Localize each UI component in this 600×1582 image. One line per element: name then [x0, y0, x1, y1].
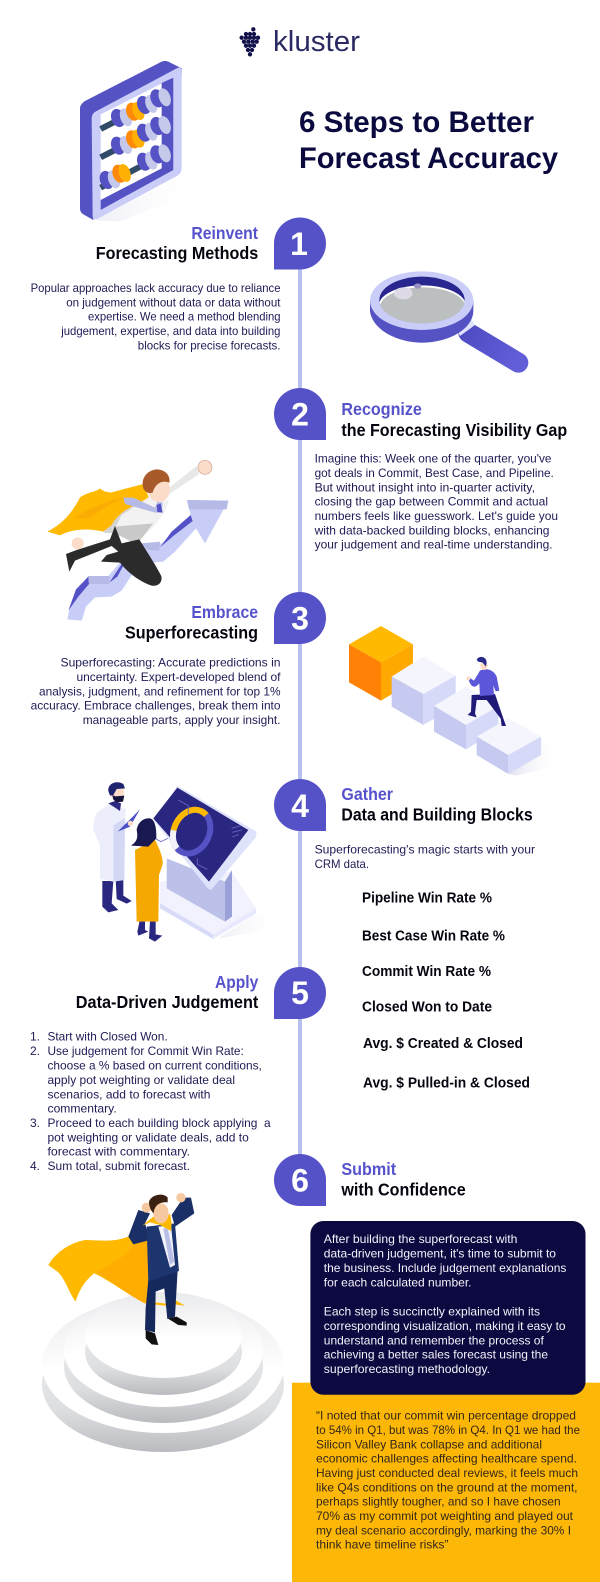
step 2 heading: Recognize [341, 399, 422, 419]
quote text: “I noted that our commit win percentage dropped [316, 1409, 576, 1423]
step 5 badge: 5 [291, 975, 309, 1011]
step 2 body text: got deals in Commit, Best Case, and Pipeline. [315, 466, 554, 480]
step 4 heading: Gather [341, 784, 393, 804]
step 5 numbered list: 2. [30, 1044, 40, 1058]
step 5 numbered list: commentary. [48, 1102, 117, 1116]
step 6 heading [340, 1159, 466, 1200]
building blocks list [362, 891, 530, 1092]
block 4 [477, 718, 541, 774]
step 5 numbered list: apply pot weighting or validate deal [48, 1073, 235, 1087]
building blocks list: Avg. $ Created & Closed [363, 1036, 523, 1052]
step 4 heading [341, 784, 533, 825]
icon: abacus [80, 61, 202, 222]
wordmark: kluster [273, 26, 360, 58]
block 3 [434, 687, 498, 749]
step 4 body text [315, 843, 535, 871]
arms [128, 1210, 150, 1244]
step 2 body text: Imagine this: Week one of the quarter, you've [315, 451, 552, 465]
panel: submit explanation: After building the superforecast with [324, 1232, 517, 1246]
step 2 body text: numbers feels like guesswork. Let's guide you [315, 509, 558, 523]
tie [123, 498, 163, 513]
panel: submit explanation: for each calculated number. [324, 1276, 472, 1290]
step 3 body text: accuracy. Embrace challenges, break them into [31, 699, 281, 713]
tier 1 [42, 1297, 284, 1452]
panel: submit explanation: corresponding visualization, making it easy to [324, 1319, 566, 1333]
beads row 1 [109, 87, 173, 129]
step 3 body text: Superforecasting: Accurate predictions in [60, 656, 280, 670]
step 5 heading: Data-Driven Judgement [76, 992, 258, 1012]
climbing figure [466, 657, 506, 726]
beads row 2 [109, 114, 173, 157]
step 1 body text: expertise. We need a method blending [88, 310, 280, 324]
timeline spine [298, 243, 302, 1193]
step 6 badge: 6 [291, 1162, 309, 1198]
trousers [145, 1270, 178, 1332]
quote text: economic challenges affecting healthcare spend. [316, 1452, 577, 1466]
shirt and tie [158, 1225, 175, 1268]
step 2 body text: closing the gap between Commit and actual [315, 495, 548, 509]
illustration: podium [42, 1292, 284, 1452]
step 2 badge: 2 [291, 396, 309, 432]
title: 6 Steps to Better [299, 106, 535, 139]
quote text: Having just conducted deal reviews, it feels much [316, 1466, 578, 1480]
step 2 body text [314, 451, 558, 552]
building blocks list: Closed Won to Date [362, 1000, 492, 1016]
icon: magnifying glass [370, 271, 518, 363]
step 5 numbered list: Sum total, submit forecast. [48, 1159, 190, 1173]
panel: submit explanation: data-driven judgement, it's time to submit to [324, 1247, 556, 1261]
step 1 body text [31, 281, 281, 352]
step 5 numbered list: 1. [30, 1030, 40, 1044]
kiosk stand [167, 858, 232, 922]
building blocks list: Pipeline Win Rate % [362, 891, 492, 907]
title: Forecast Accuracy [299, 142, 559, 175]
step 3 badge: 3 [291, 600, 309, 636]
beads row 3 [97, 143, 173, 191]
step 5 numbered list: choose a % based on current conditions, [48, 1059, 262, 1073]
panel: quote background [292, 1383, 600, 1582]
step 3 heading: Superforecasting [125, 623, 258, 643]
head [143, 469, 170, 502]
step 1 heading [96, 223, 259, 263]
quote text: like Q4s conditions on the ground at the moment, [316, 1480, 578, 1494]
step 2 badge [274, 388, 326, 440]
step 5 numbered list: Use judgement for Commit Win Rate: [48, 1044, 244, 1058]
kiosk screen [153, 786, 257, 890]
woman in yellow coat [131, 818, 163, 942]
step 5 numbered list: 3. [30, 1116, 40, 1130]
step 4 badge: 4 [291, 788, 309, 824]
step 3 body text: uncertainty. Expert-developed blend of [76, 670, 281, 684]
step 5 heading [76, 972, 259, 1012]
step 3 heading: Embrace [191, 602, 258, 622]
step 5 numbered list: Proceed to each building block applying a [48, 1116, 271, 1130]
quote text: 70% as my commit pot weighting and played out [316, 1509, 574, 1523]
step 2 body text: your judgement and real-time understanding. [315, 538, 553, 552]
step 1 heading: Reinvent [191, 223, 258, 243]
logo: kluster [239, 26, 360, 58]
quote text [316, 1409, 580, 1552]
tier 3 [85, 1292, 242, 1395]
step 5 badge [274, 967, 326, 1019]
step 3 badge [274, 592, 326, 644]
head [149, 1195, 169, 1223]
kiosk base [160, 872, 256, 939]
quote text: perhaps slightly tougher, and so I have chosen [316, 1495, 561, 1509]
shirt [115, 497, 169, 543]
building blocks list: Commit Win Rate % [362, 964, 491, 980]
shoes [146, 1330, 158, 1345]
orange cube [349, 626, 413, 701]
raised arm [168, 466, 199, 494]
quote text: my deal scenario accordingly, marking the 30% I [316, 1523, 571, 1537]
step 2 body text: But without insight into in-quarter activity, [315, 480, 535, 494]
panel: submit explanation: understand and remember the process of [324, 1333, 544, 1347]
step 1 heading: Forecasting Methods [96, 243, 259, 263]
panel: submit explanation: Each step is succinctly explained with its [324, 1305, 540, 1319]
illustration: climbing blocks [349, 626, 562, 776]
step 5 numbered list [30, 1030, 271, 1173]
step 2 body text: with data-backed building blocks, enhancing [314, 523, 550, 537]
step 1 body text: judgement, expertise, and data into building [60, 324, 280, 338]
legs [66, 526, 162, 586]
step 4 body text: Superforecasting's magic starts with your [315, 843, 535, 857]
step 5 numbered list: Start with Closed Won. [48, 1030, 168, 1044]
panel: submit explanation: superforecasting methodology. [324, 1362, 490, 1376]
icon: grape cluster [239, 27, 260, 56]
block 2 [392, 657, 456, 725]
step 1 body text: blocks for precise forecasts. [138, 338, 280, 352]
collar [142, 1213, 172, 1231]
step 3 body text [31, 656, 281, 727]
step 2 heading: the Forecasting Visibility Gap [341, 420, 567, 440]
step 5 numbered list: forecast with commentary. [48, 1145, 190, 1159]
cape [48, 1235, 185, 1307]
jacket [147, 1223, 179, 1282]
step 1 badge [274, 218, 326, 270]
cape [47, 484, 150, 535]
arrow [67, 500, 228, 621]
step 4 heading: Data and Building Blocks [341, 805, 533, 825]
step 1 body text: Popular approaches lack accuracy due to reliance [31, 281, 281, 295]
illustration: caped businessman [48, 1193, 194, 1345]
panel: submit explanation [310, 1221, 586, 1395]
step 6 heading: Submit [341, 1159, 396, 1179]
step 3 heading [125, 602, 258, 643]
step 5 numbered list: 4. [30, 1159, 40, 1173]
quote text: Silicon Valley Bank collapse and additional [316, 1437, 542, 1451]
tier 2 [64, 1293, 263, 1423]
quote text: to 54% in Q1, but was 78% in Q4. In Q1 we had the [316, 1423, 580, 1437]
step 5 numbered list: scenarios, add to forecast with [48, 1087, 210, 1101]
quote text: think have timeline risks” [316, 1538, 448, 1552]
step 5 heading: Apply [215, 972, 259, 992]
step 3 body text: manageable parts, apply your insight. [83, 713, 280, 727]
step 1 body text: on judgement without data or data without [66, 295, 281, 309]
panel: submit explanation: achieving a better sales forecast using the [324, 1348, 548, 1362]
step 6 badge [274, 1154, 326, 1206]
step 4 badge [274, 779, 326, 831]
step 6 heading: with Confidence [340, 1180, 466, 1200]
title [299, 106, 559, 175]
illustration: flying hero with arrow [47, 460, 228, 621]
doctor [93, 782, 140, 912]
panel: submit explanation: the business. Include judgement explanations [324, 1261, 566, 1275]
building blocks list: Avg. $ Pulled-in & Closed [363, 1076, 530, 1092]
step 5 numbered list: pot weighting or validate deals, add to [48, 1130, 249, 1144]
step 3 body text: analysis, judgment, and refinement for top 1% [39, 684, 281, 698]
step 1 badge: 1 [290, 226, 308, 262]
step 4 body text: CRM data. [315, 857, 369, 871]
step 2 heading [341, 399, 567, 440]
building blocks list: Best Case Win Rate % [362, 929, 505, 945]
illustration: analysts at data kiosk [93, 782, 285, 942]
